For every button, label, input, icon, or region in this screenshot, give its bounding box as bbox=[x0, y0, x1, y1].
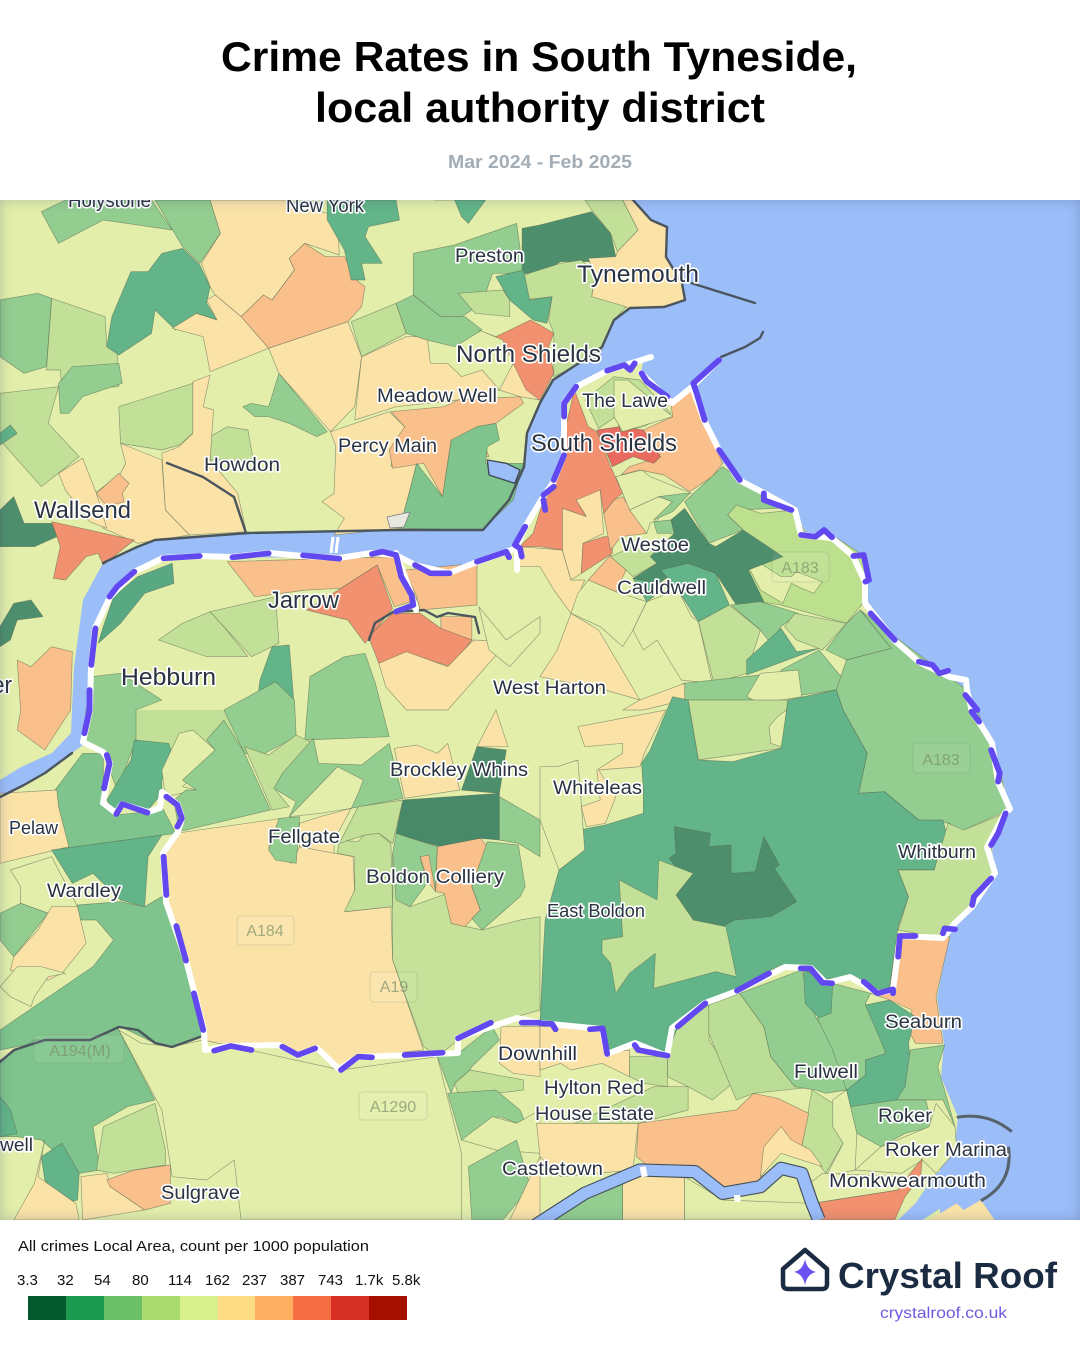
small place labels: Roker Marina bbox=[885, 1140, 1007, 1161]
road markers: A194(M) bbox=[49, 1043, 111, 1060]
legend values: 32 bbox=[57, 1272, 74, 1289]
legend values: 162 bbox=[205, 1272, 230, 1289]
title: local authority district bbox=[315, 84, 765, 131]
small place labels: Whitburn bbox=[898, 842, 976, 862]
small place labels: Monkwearmouth bbox=[829, 1171, 986, 1192]
legend title: All crimes Local Area, count per 1000 population bbox=[18, 1238, 369, 1255]
legend values: 114 bbox=[168, 1272, 192, 1289]
choropleth areas bbox=[0, 200, 1008, 1220]
legend values bbox=[17, 1272, 421, 1289]
piers, bank and dock lines bbox=[0, 200, 763, 1062]
road markers: A1290 bbox=[370, 1099, 416, 1116]
small place labels: Cauldwell bbox=[617, 578, 706, 599]
small place labels: Downhill bbox=[498, 1044, 577, 1065]
large town labels: South Shields bbox=[531, 430, 677, 457]
small place labels: Howdon bbox=[204, 455, 280, 476]
large town labels: Wallsend bbox=[34, 497, 131, 524]
legend values: 3.3 bbox=[17, 1272, 38, 1289]
small place labels: Sulgrave bbox=[161, 1183, 240, 1204]
small place labels: Fulwell bbox=[794, 1062, 858, 1083]
small place labels: Pelaw bbox=[9, 818, 59, 838]
icon: house with star bbox=[783, 1250, 827, 1289]
road markers: A19 bbox=[380, 979, 408, 996]
legend values: 237 bbox=[242, 1272, 267, 1289]
small place labels: Castletown bbox=[502, 1159, 603, 1180]
large town labels: Tynemouth bbox=[577, 261, 699, 288]
legend values: 743 bbox=[318, 1272, 343, 1289]
small place labels: The Lawe bbox=[582, 391, 668, 412]
legend values: 387 bbox=[280, 1272, 305, 1289]
small place labels: Whiteleas bbox=[553, 778, 642, 799]
tyne crossing bbox=[331, 512, 410, 553]
website: crystalroof.co.uk bbox=[880, 1305, 1008, 1322]
legend colour scale bbox=[28, 1296, 407, 1320]
map panel bbox=[0, 200, 1080, 1220]
road markers bbox=[34, 552, 970, 1120]
map edge shading bbox=[0, 200, 1080, 1220]
small place labels: Percy Main bbox=[338, 436, 437, 457]
small place labels: Meadow Well bbox=[377, 386, 497, 407]
small place labels: East Boldon bbox=[547, 901, 645, 921]
small place labels: Westoe bbox=[621, 535, 689, 556]
small place labels: well bbox=[0, 1135, 33, 1155]
small place labels: Seaburn bbox=[885, 1012, 962, 1033]
land base south of the Tyne bbox=[0, 362, 1010, 1220]
small place labels: West Harton bbox=[493, 678, 606, 699]
land base north of the Tyne bbox=[0, 200, 685, 780]
road markers: A183 bbox=[922, 752, 960, 769]
title: Crime Rates in South Tyneside, bbox=[221, 33, 857, 80]
brand logo bbox=[780, 1248, 1058, 1322]
title: Mar 2024 - Feb 2025 bbox=[448, 152, 632, 172]
small place labels: Roker bbox=[878, 1106, 933, 1127]
district boundary bbox=[83, 357, 1010, 1070]
sea bbox=[0, 200, 1080, 1220]
place labels bbox=[0, 191, 1007, 1204]
legend bbox=[17, 1238, 421, 1320]
small place labels: Boldon Colliery bbox=[366, 867, 505, 888]
legend values: 54 bbox=[94, 1272, 111, 1289]
small place labels: Preston bbox=[455, 246, 524, 267]
road markers: A184 bbox=[246, 923, 284, 940]
large town labels: Hebburn bbox=[121, 664, 216, 691]
large town labels: North Shields bbox=[456, 341, 601, 368]
small place labels bbox=[0, 191, 1007, 1204]
small place labels: Wardley bbox=[47, 881, 122, 902]
small place labels: House Estate bbox=[535, 1104, 654, 1125]
legend values: 5.8k bbox=[392, 1272, 421, 1289]
title bbox=[221, 33, 857, 172]
legend values: 1.7k bbox=[355, 1272, 384, 1289]
wordmark: Crystal Roof bbox=[838, 1255, 1058, 1296]
large town labels: Jarrow bbox=[268, 587, 340, 614]
river wear bbox=[533, 1116, 1012, 1227]
small place labels: Fellgate bbox=[268, 827, 340, 848]
small place labels: Brockley Whins bbox=[390, 760, 528, 781]
large town labels bbox=[0, 261, 699, 699]
legend values: 80 bbox=[132, 1272, 149, 1289]
small place labels: Hylton Red bbox=[544, 1078, 644, 1099]
road markers: A183 bbox=[781, 560, 819, 577]
